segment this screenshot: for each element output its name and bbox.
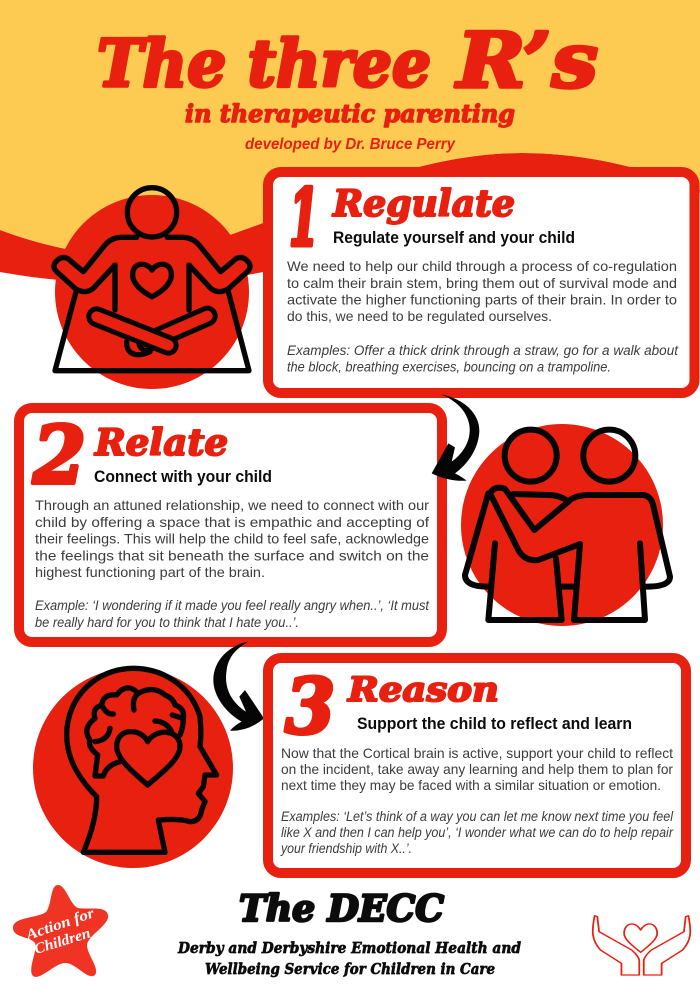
body text: child by offering a space that is empathic and accepting of bbox=[35, 514, 429, 530]
body text: do this, we need to be regulated ourselves. bbox=[287, 308, 552, 324]
footer title: The DECC bbox=[239, 888, 444, 930]
heading: regulate: Regulate bbox=[332, 183, 515, 225]
numeral 3: 3 bbox=[285, 662, 335, 751]
examples text: like X and then I can help you’, ‘I wonder what we can do to help repair bbox=[281, 825, 673, 840]
body text: next time they may be faced with a similar situation or emotion. bbox=[281, 777, 661, 793]
main title bbox=[97, 16, 598, 105]
body text: their feelings. This will help the child to feel safe, acknowledge bbox=[35, 530, 429, 546]
subheading: Support the child to reflect and learn bbox=[357, 714, 632, 733]
heading: relate: Relate bbox=[94, 422, 228, 464]
body text bbox=[281, 745, 673, 793]
logo: action for children star: Children bbox=[32, 926, 93, 958]
footer service name bbox=[177, 939, 521, 978]
body text: highest functioning part of the brain. bbox=[35, 564, 265, 580]
footer service name: Derby and Derbyshire Emotional Health and bbox=[177, 939, 521, 957]
body text: Now that the Cortical brain is active, support your child to reflect bbox=[281, 745, 673, 761]
main title: The three bbox=[97, 26, 431, 102]
arrow: relate to reason bbox=[213, 642, 264, 731]
examples text: the block, breathing exercises, bouncing on a trampoline. bbox=[287, 360, 611, 374]
icon: hands holding heart bbox=[593, 916, 690, 975]
logo: action for children star bbox=[13, 885, 108, 977]
body text bbox=[35, 497, 429, 580]
body text: the feelings that sit beneath the surface and switch on the bbox=[35, 548, 429, 564]
example text: Example: ‘I wondering if it made you feel really angry when..’, ‘It must bbox=[35, 598, 430, 613]
panel: reason bbox=[268, 658, 686, 873]
body text: We need to help our child through a process of co-regulation bbox=[287, 258, 677, 274]
icon: head with brain and heart bbox=[33, 668, 233, 868]
example text bbox=[35, 598, 430, 630]
examples text: your friendship with X..’. bbox=[280, 841, 412, 856]
body text: to calm their brain stem, bring them out of survival mode and bbox=[287, 275, 677, 291]
logo: action for children star: Action for bbox=[23, 905, 97, 944]
body text bbox=[287, 258, 677, 324]
body text: activate the higher functioning parts of their brain. In order to bbox=[287, 292, 677, 308]
examples text bbox=[287, 343, 679, 374]
numeral 1: 1 bbox=[289, 173, 319, 264]
numeral 2: 2 bbox=[32, 408, 86, 502]
red wave band bbox=[0, 153, 700, 284]
yellow header background bbox=[0, 0, 700, 255]
examples text bbox=[280, 809, 674, 856]
arrow: regulate to relate bbox=[432, 394, 479, 481]
attribution: developed by Dr. Bruce Perry bbox=[245, 136, 456, 153]
subtitle: in therapeutic parenting bbox=[185, 99, 515, 128]
examples text: Examples: Offer a thick drink through a straw, go for a walk about bbox=[287, 343, 679, 358]
body text: Through an attuned relationship, we need to connect with our bbox=[35, 497, 429, 513]
panel: regulate bbox=[268, 172, 694, 393]
footer service name: Wellbeing Service for Children in Care bbox=[205, 960, 495, 978]
examples text: Examples: ‘Let’s think of a way you can let me know next time you feel bbox=[281, 809, 674, 824]
main title: R’s bbox=[455, 16, 598, 105]
icon: two people embracing bbox=[461, 424, 670, 626]
heading: reason: Reason bbox=[347, 670, 499, 710]
panel: relate bbox=[19, 408, 442, 642]
body text: on the incident, take away any learning and help them to plan for bbox=[281, 761, 673, 777]
subheading: Regulate yourself and your child bbox=[333, 228, 575, 247]
subheading: Connect with your child bbox=[94, 467, 272, 486]
example text: be really hard for you to think that I hate you..’. bbox=[35, 615, 299, 630]
icon: meditating figure with heart bbox=[54, 188, 250, 389]
